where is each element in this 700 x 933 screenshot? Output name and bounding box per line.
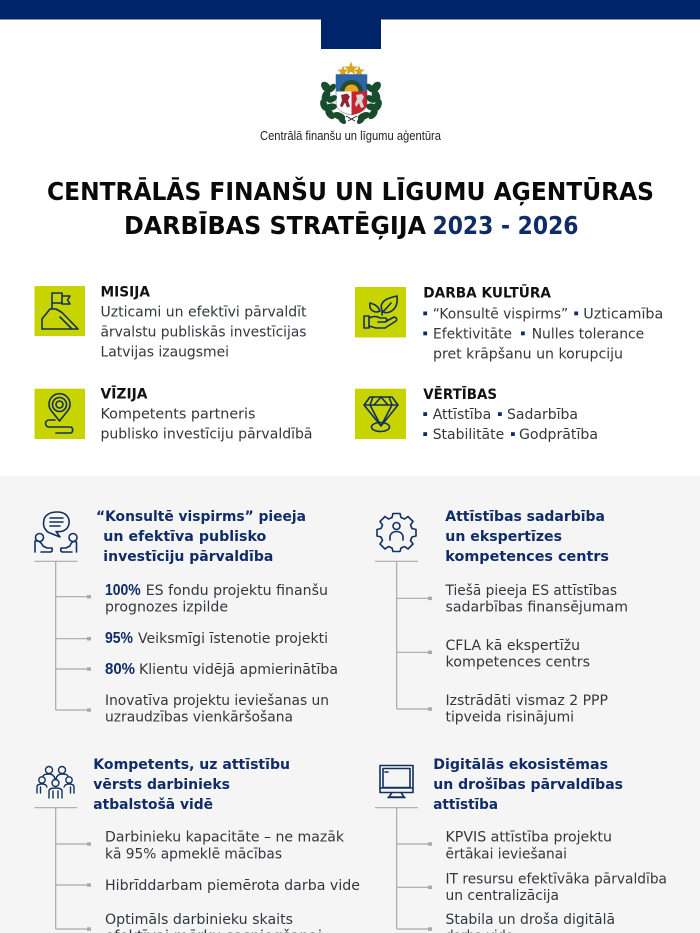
icon: group of people [37, 766, 74, 798]
panel: Attīstības sadarbība [375, 508, 628, 726]
list items: Hibrīddarbam piemērota darba vide [105, 878, 360, 894]
connector tree [34, 808, 91, 931]
darba kultura text: Efektivitāte [433, 326, 512, 342]
title [47, 176, 654, 240]
darba kultura text: Uzticamība [583, 306, 663, 322]
panel: Konsultē vispirms [34, 508, 338, 726]
list items: Izstrādāti vismaz 2 PPP [446, 693, 608, 709]
heading: investīciju pārvaldība [103, 548, 273, 565]
title: DARBĪBAS STRATĒĢIJA [124, 211, 427, 240]
icon: gear with person [377, 514, 416, 552]
heading: un drošības pārvaldības [433, 776, 623, 793]
vizija text: Kompetents partneris [100, 406, 256, 422]
connector tree [34, 561, 91, 712]
list items: CFLA kā ekspertīžu [446, 638, 580, 654]
misija text [100, 284, 307, 361]
list items: Veiksmīgi īstenotie projekti [138, 631, 328, 647]
icon: hand holding plant [355, 287, 406, 338]
heading: Digitālās ekosistēmas [433, 756, 608, 773]
list items [445, 583, 628, 726]
list items: kā 95% apmeklē mācības [105, 846, 282, 862]
list items: 80% [105, 661, 135, 678]
heading: kompetences centrs [445, 548, 609, 565]
vizija text: publisko investīciju pārvaldībā [100, 426, 312, 442]
darba kultura text: “Konsultē vispirms” [433, 306, 568, 322]
title: CENTRĀLĀS FINANŠU UN LĪGUMU AĢENTŪRAS [47, 176, 654, 206]
list items: Klientu vidējā apmierinātība [139, 662, 338, 678]
list items [105, 830, 360, 933]
darba kultura text [423, 284, 663, 362]
logo caption: Centrālā finanšu un līgumu aģentūra [260, 128, 442, 143]
list items: Inovatīva projektu ieviešanas un [105, 693, 329, 709]
list items: uzraudzības vienkāršošana [105, 710, 293, 726]
list items: IT resursu efektīvāka pārvaldība [446, 871, 667, 887]
vertibas text: Attīstība [433, 407, 491, 423]
heading: un ekspertīzes [445, 528, 562, 545]
list items [446, 830, 667, 933]
list items: tipveida risinājumi [446, 710, 574, 726]
darba kultura text: DARBA KULTŪRA [423, 284, 552, 302]
misija text: Uzticami un efektīvi pārvaldīt [100, 305, 307, 321]
list items: KPVIS attīstība projektu [446, 830, 612, 846]
list items: un centralizācija [446, 888, 559, 904]
vertibas text [423, 385, 598, 443]
misija text: MISIJA [100, 284, 151, 301]
panel: darba kultura [355, 284, 663, 362]
list items: ES fondu projektu finanšu [146, 583, 328, 599]
list items: sadarbības finansējumam [446, 600, 628, 616]
list items: 95% [105, 630, 133, 647]
list items: Optimāls darbinieku skaits [105, 912, 293, 928]
heading: vērsts darbinieks [93, 776, 230, 793]
panel: vizija [34, 384, 312, 442]
icon: diamond [355, 389, 406, 439]
icon: computer monitor [380, 766, 413, 798]
list items: prognozes izpilde [105, 600, 228, 616]
panel: Kompetents darbinieks [34, 756, 360, 933]
connector tree [375, 808, 432, 931]
gray background section [0, 476, 700, 933]
vertibas text: VĒRTĪBAS [423, 385, 497, 403]
misija text: ārvalstu publiskās investīcijas [100, 325, 306, 341]
heading: attīstība [433, 796, 498, 813]
list items [105, 582, 338, 726]
heading: un efektīva publisko [103, 528, 266, 545]
darba kultura text: Nulles tolerance [532, 326, 644, 342]
list items: 100% [105, 582, 141, 599]
connector tree [375, 561, 432, 711]
icon: mountain with flag [34, 286, 85, 336]
logo: Latvian coat of arms [319, 62, 383, 126]
list items: Darbinieku kapacitāte – ne mazāk [105, 830, 345, 846]
darba kultura text: pret krāpšanu un korupciju [433, 346, 623, 362]
icon: two people talking [35, 512, 77, 552]
vizija text [100, 384, 312, 442]
panel: misija [34, 284, 307, 361]
title: 2023 - 2026 [432, 211, 578, 240]
vertibas text: Sadarbība [507, 407, 578, 423]
heading [445, 508, 609, 565]
list items: kompetences centrs [446, 655, 590, 671]
heading: atbalstošā vidē [93, 796, 213, 813]
vizija text: VĪZIJA [100, 384, 148, 402]
heading: Attīstības sadarbība [445, 508, 605, 525]
heading [96, 508, 306, 565]
heading: Kompetents, uz attīstību [93, 756, 290, 773]
list items: Tiešā pieeja ES attīstības [445, 583, 617, 599]
heading: “Konsultē vispirms” pieeja [96, 508, 306, 525]
heading [93, 756, 290, 813]
list items: ērtākai ieviešanai [446, 846, 567, 862]
panel: Digitālās ekosistēmas [375, 756, 667, 933]
misija text: Latvijas izaugsmei [100, 345, 229, 361]
panel: vertibas [355, 385, 598, 443]
top banner [0, 0, 700, 49]
vertibas text: Godprātība [519, 427, 598, 443]
vertibas text: Stabilitāte [433, 427, 504, 443]
icon: location pin with route [34, 389, 85, 439]
list items: Stabila un droša digitālā [446, 912, 615, 928]
heading [433, 756, 623, 813]
